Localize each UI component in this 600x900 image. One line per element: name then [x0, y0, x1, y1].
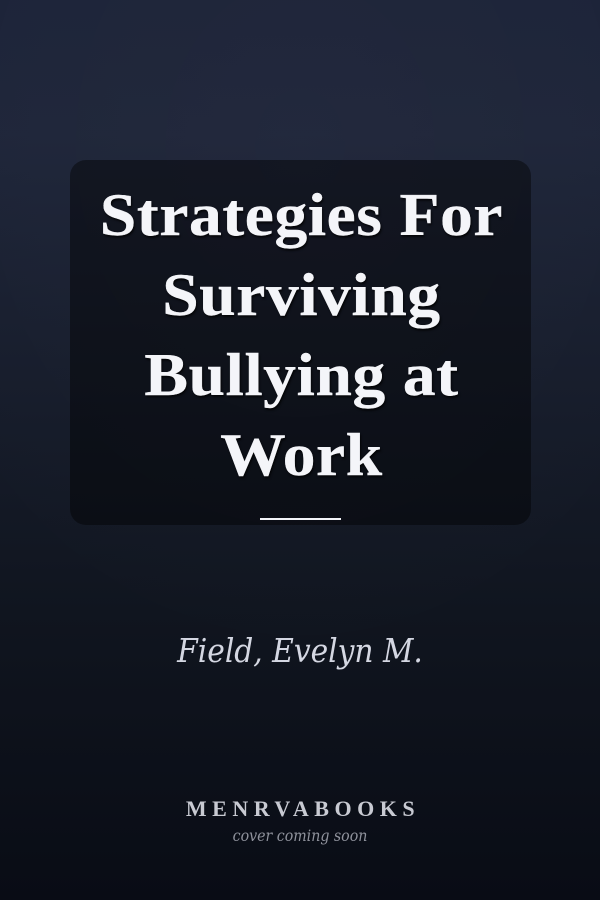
title — [100, 182, 503, 488]
title: Surviving — [162, 262, 441, 328]
title: Strategies For — [100, 182, 503, 248]
author: Field, Evelyn M. — [177, 631, 423, 670]
title: Work — [220, 422, 383, 488]
title: Bullying at — [144, 342, 459, 408]
publisher brand: MENRVABOOKS — [186, 796, 420, 821]
tagline: cover coming soon — [233, 826, 367, 845]
panel: title card — [70, 160, 531, 525]
title underline — [260, 518, 341, 520]
